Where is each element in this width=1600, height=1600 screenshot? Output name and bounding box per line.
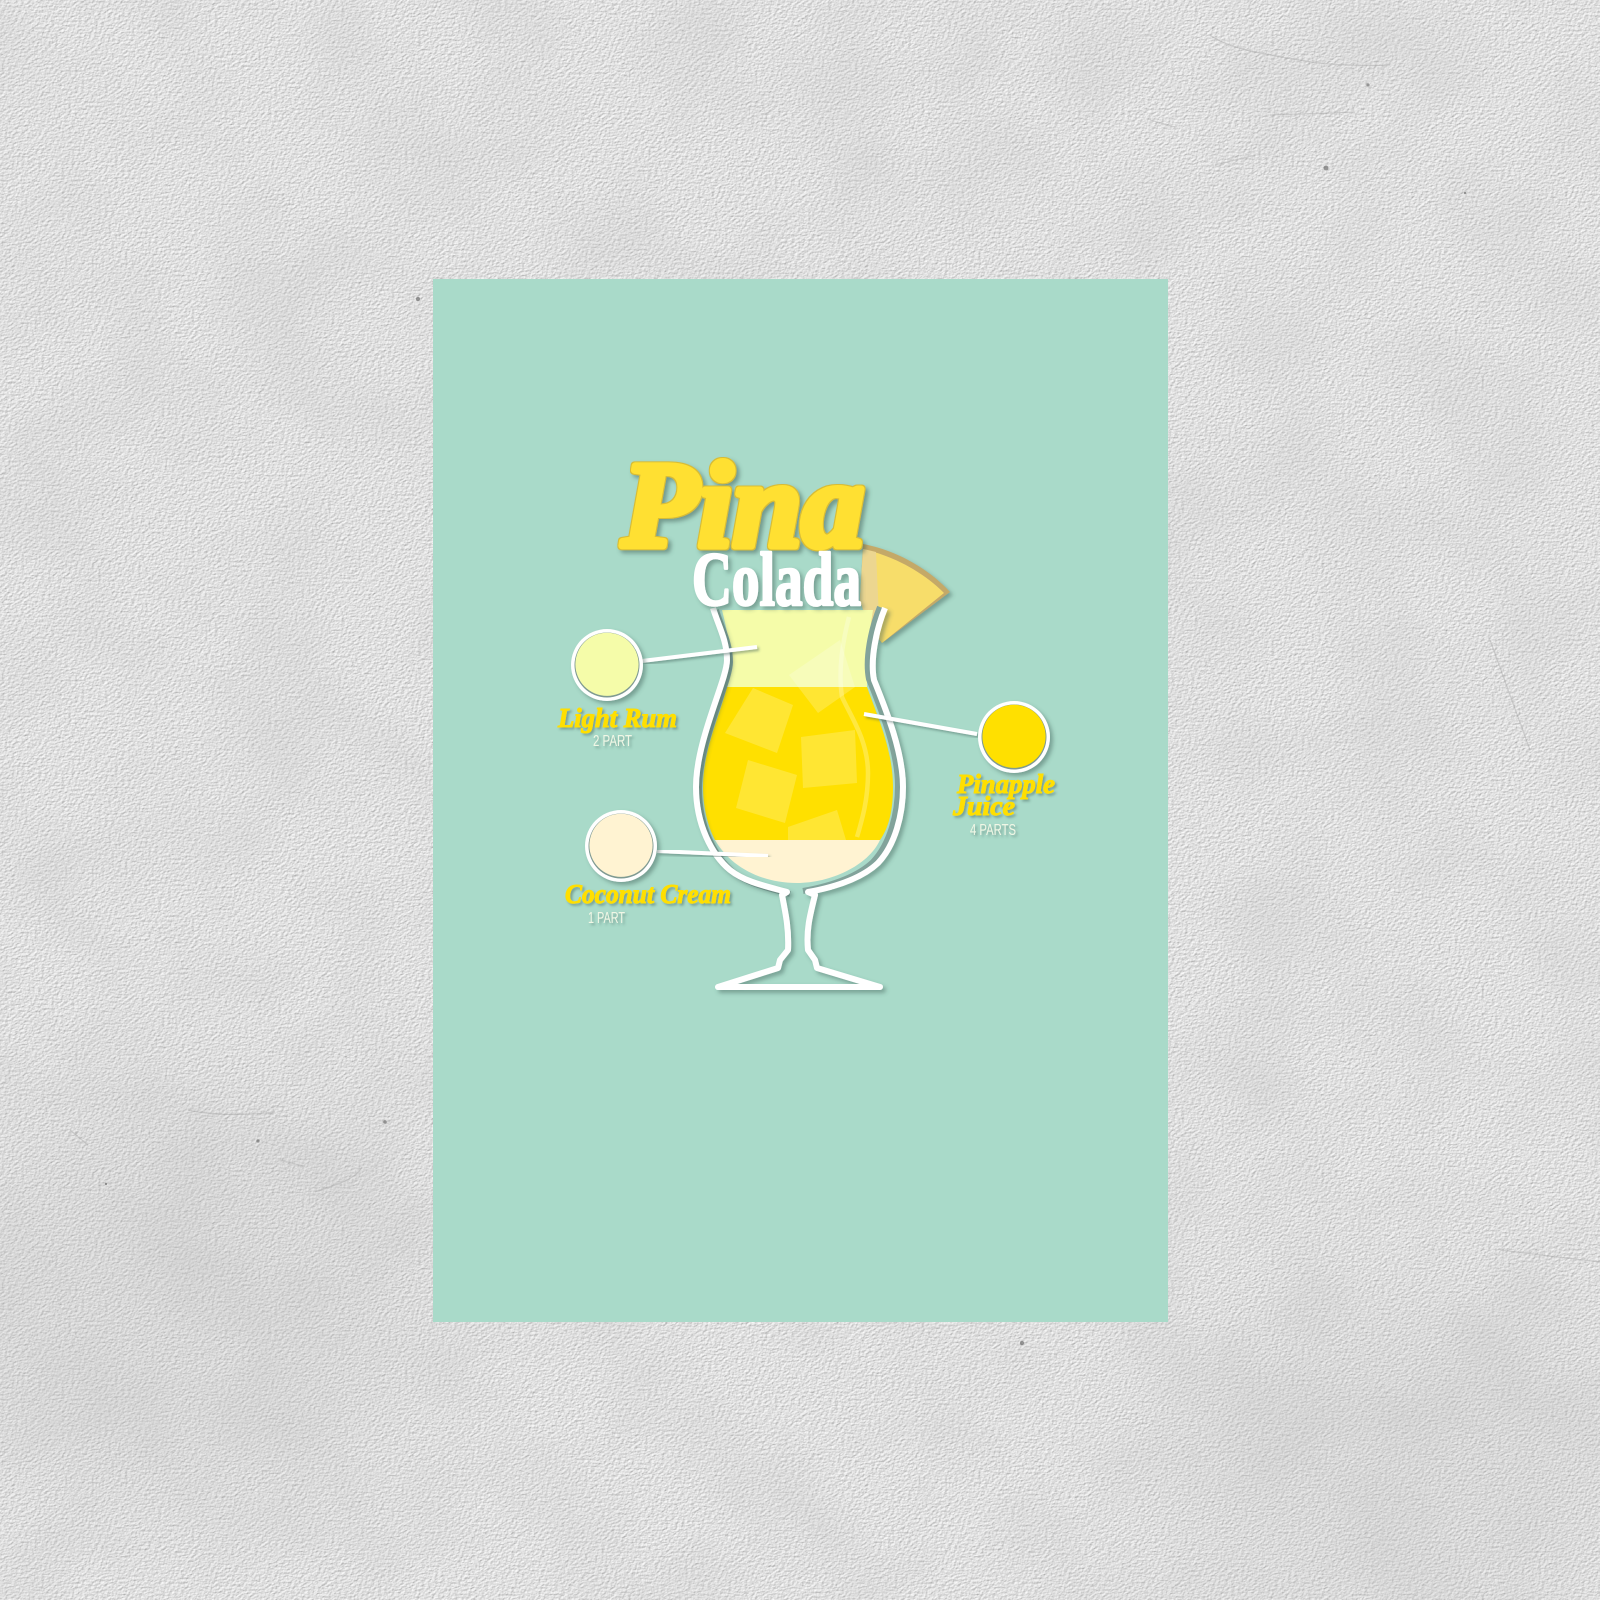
- icon: pineapple wedge garnish: [860, 544, 950, 643]
- connector line: [642, 647, 757, 661]
- callout: coconut cream: [565, 810, 768, 927]
- label: Pinapple: [956, 769, 1055, 799]
- poster panel: [433, 279, 1168, 1322]
- drink liquid layers: [700, 608, 900, 886]
- layer: light rum: [722, 610, 873, 687]
- title: Colada: Colada: [692, 538, 861, 622]
- layer: pineapple juice: [700, 687, 900, 840]
- parts: 4 PARTS: [970, 822, 1016, 839]
- swatch: [585, 810, 657, 882]
- ice cubes: [725, 640, 857, 840]
- glass outline: [696, 607, 903, 987]
- callout: light rum: [557, 629, 757, 750]
- label: Light Rum: [557, 703, 677, 733]
- label: Coconut Cream: [565, 879, 731, 909]
- title: Pina: Pina: [621, 438, 864, 573]
- swatch: [571, 629, 643, 701]
- label second line: Juice: [952, 791, 1015, 821]
- parts: 2 PART: [593, 733, 632, 750]
- callout: pineapple juice: [864, 701, 1055, 839]
- parts: 1 PART: [588, 910, 625, 927]
- connector line: [657, 851, 768, 856]
- glass highlight: [841, 617, 868, 837]
- swatch: [978, 701, 1050, 773]
- connector line: [864, 714, 977, 734]
- layer: coconut cream: [715, 840, 880, 883]
